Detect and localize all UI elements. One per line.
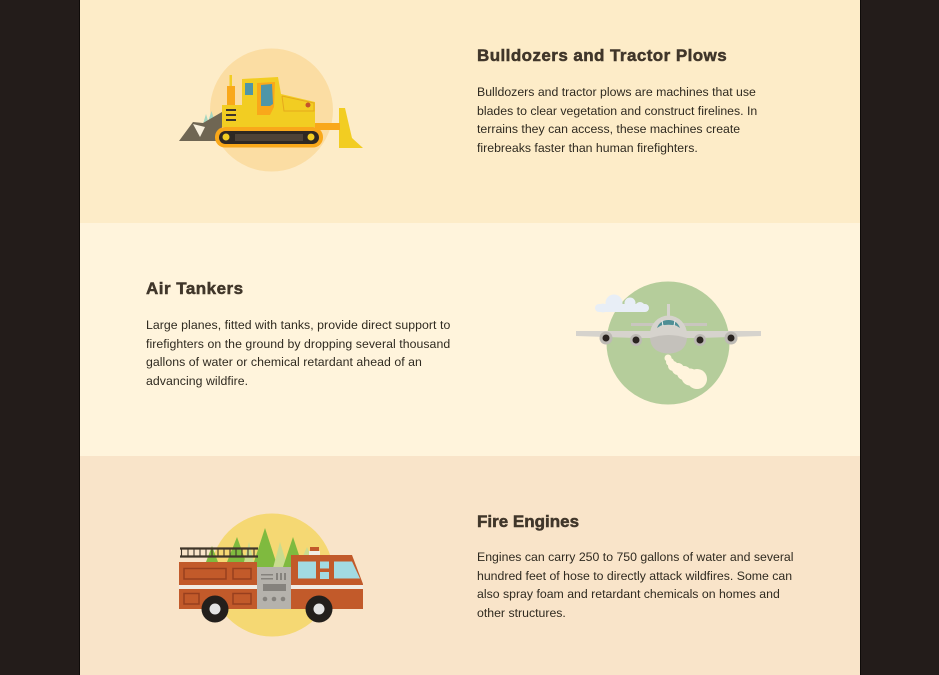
text: air tankers description: Large planes, fitted with tanks, provide direct support to	[146, 318, 450, 332]
wheels	[202, 596, 228, 622]
heading: bulldozers: Bulldozers and Tractor Plows	[477, 46, 727, 65]
text: bulldozers description: blades to clear vegetation and construct firelines. In	[477, 104, 757, 118]
icon: bulldozer	[179, 48, 363, 172]
text: air tankers description: gallons of water or chemical retardant ahead of an	[146, 355, 422, 369]
text: fire engines description	[477, 550, 794, 620]
text: air tankers description: advancing wildfire.	[146, 374, 248, 388]
heading: air tankers: Air Tankers	[146, 279, 244, 298]
text: air tankers description: firefighters on the ground by dropping several thousand	[146, 337, 450, 351]
text: bulldozers description	[477, 85, 757, 155]
smoke trail	[664, 354, 707, 389]
text: fire engines description: other structures.	[477, 606, 566, 620]
panel: fire engines background	[80, 456, 860, 675]
icon: air tanker plane	[576, 282, 761, 404]
panel: air tankers background	[80, 223, 860, 456]
text: bulldozers description: firebreaks faster than human firefighters.	[477, 141, 698, 155]
icon: fire engine	[179, 514, 363, 636]
text: bulldozers description: Bulldozers and tractor plows are machines that use	[477, 85, 756, 99]
trees	[206, 528, 319, 568]
text: fire engines description: Engines can carry 250 to 750 gallons of water and several	[477, 550, 794, 564]
cloud	[595, 294, 649, 312]
heading: fire engines: Fire Engines	[477, 512, 579, 531]
text: air tankers description	[146, 318, 450, 388]
text: fire engines description: hundred feet of hose to directly attack wildfires. Some can	[477, 569, 792, 583]
text: bulldozers description: terrains they can access, these machines create	[477, 122, 740, 136]
text: fire engines description: also spray foam and retardant chemicals on homes and	[477, 587, 780, 601]
ladder	[180, 548, 258, 557]
panel: bulldozers background	[80, 0, 860, 223]
